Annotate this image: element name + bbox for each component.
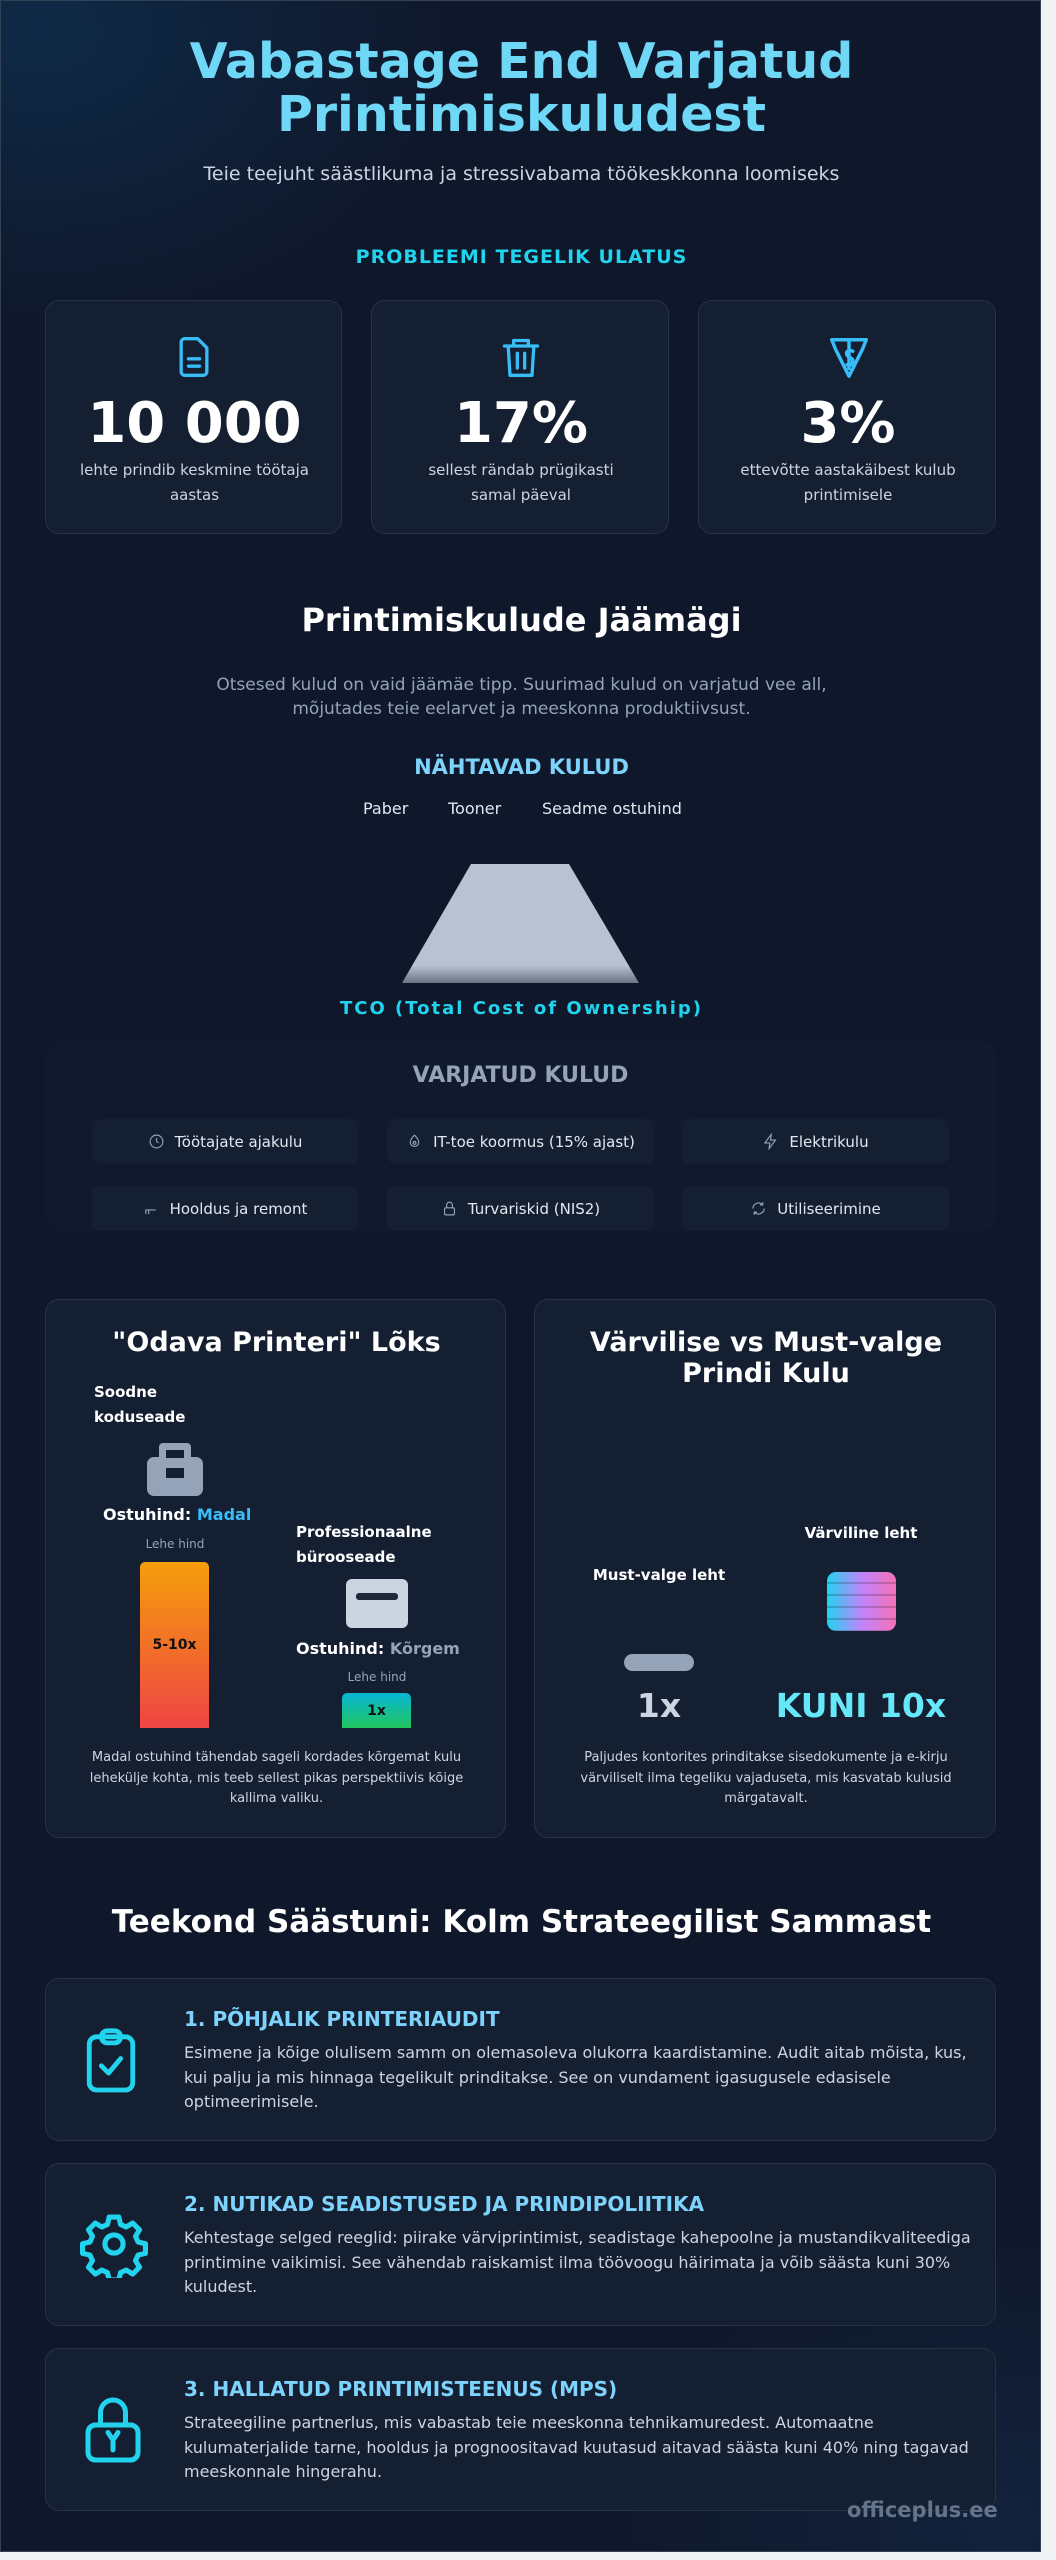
iceberg heading: Printimiskulude Jäämägi [301, 601, 742, 639]
chip: disposal [682, 1186, 949, 1231]
value KUNI 10x: KUNI 10x [776, 1686, 946, 1725]
panel: cheap printer trap [45, 1299, 506, 1838]
stat label: sellest rändab prügikasti samal päeval [428, 461, 614, 504]
step text: Kehtestage selged reeglid: piirake värviprintimist, seadistage kahepoolne ja mustandikvaliteediga printimine vaikimisi. See vähendab raiskamist ilma töövoogu häirimata ja võib säästa kuni 30% kuludest. [184, 2228, 971, 2296]
chip: disposal: Utiliseerimine [777, 1200, 881, 1218]
panel: color vs mono [534, 1299, 996, 1838]
step 2 card [45, 2163, 996, 2326]
label: Soodne [94, 1383, 157, 1401]
icon: color stack [827, 1572, 896, 1631]
panel: hidden costs [45, 1041, 996, 1231]
label: koduseade [94, 1408, 185, 1426]
TCO label: TCO (Total Cost of Ownership) [340, 998, 703, 1019]
icon: single sheet [624, 1654, 694, 1671]
subtitle: Teie teejuht säästlikuma ja stressivabama töökeskkonna loomiseks [204, 163, 839, 185]
chip: security [387, 1186, 654, 1231]
icon: trash [502, 338, 540, 377]
icon: document [180, 337, 208, 377]
chip: maintenance [92, 1186, 358, 1231]
iceberg intro text: Otsesed kulud on vaid jäämäe tipp. Suurimad kulud on varjatud vee all, [216, 675, 827, 695]
step 1 card [45, 1978, 996, 2141]
chip: security: Turvariskid (NIS2) [468, 1200, 600, 1218]
icon: clipboard check [86, 2028, 136, 2092]
stat card: 10 000 [45, 300, 342, 534]
step text: Esimene ja kõige olulisem samm on olemasoleva olukorra kaardistamine. Audit aitab mõista, kus, kui palju ja mis hinnaga tegelikult prinditakse. See on vundament igasugusele edasisele optimeerimisele. [184, 2043, 967, 2111]
stat number: 17% [454, 391, 588, 456]
chip: IT support [387, 1119, 654, 1164]
title: Vabastage End Varjatud [190, 33, 853, 90]
label: Värviline leht [805, 1524, 917, 1542]
visible costs heading: NÄHTAVAD KULUD [414, 755, 629, 779]
stat number: 3% [800, 391, 896, 456]
step title: 2. NUTIKAD SEADISTUSED JA PRINDIPOLIITIKA [184, 2192, 704, 2216]
value 1x: 1x [637, 1686, 681, 1725]
color column [776, 1524, 946, 1725]
page cost label: Lehe hind [348, 1670, 406, 1684]
title: Printimiskuludest [277, 86, 766, 143]
panel footnote: Paljudes kontorites prinditakse sisedokumente ja e-kirju värviliselt ilma tegeliku vajaduseta, mis kasvatab kulusid märgatavalt. [580, 1750, 952, 1806]
visible costs list: Seadme ostuhind [542, 799, 682, 818]
icon: money funnel [830, 338, 868, 378]
visible costs list [363, 799, 682, 818]
visible costs list: Paber [363, 799, 408, 818]
label: bürooseade [296, 1548, 396, 1566]
label: Must-valge leht [593, 1566, 725, 1584]
office device column [296, 1523, 460, 1728]
chip: electricity [682, 1119, 949, 1164]
stat label: lehte prindib keskmine töötaja aastas [80, 461, 309, 504]
iceberg tip shape [402, 864, 639, 983]
hidden costs heading: VARJATUD KULUD [413, 1063, 628, 1088]
stat card: 17% [371, 300, 669, 534]
chip: maintenance: Hooldus ja remont [170, 1200, 307, 1218]
chip: IT support: IT-toe koormus (15% ajast) [433, 1132, 635, 1150]
panel footnote: Madal ostuhind tähendab sageli kordades kõrgemat kulu lehekülje kohta, mis teeb sellest pikas perspektiivis kõige kallima valiku. [90, 1750, 463, 1806]
panel title [590, 1327, 942, 1389]
label: Professionaalne [296, 1523, 432, 1541]
steps heading: Teekond Säästuni: Kolm Strateegilist Sammast [112, 1904, 931, 1940]
title [190, 33, 853, 143]
step 3 card [45, 2348, 996, 2511]
step text: Strateegiline partnerlus, mis vabastab teie meeskonna tehnikamuredest. Automaatne kulumaterjalide tarne, hooldus ja prognoositavad kuutasud aitavad säästa kuni 40% ning tagavad meeskonnale hingerahu. [184, 2413, 969, 2481]
step title: 1. PÕHJALIK PRINTERIAUDIT [184, 2007, 500, 2031]
step title: 3. HALLATUD PRINTIMISTEENUS (MPS) [184, 2377, 617, 2401]
icon: home printer [147, 1443, 203, 1496]
home device column [94, 1383, 251, 1728]
visible costs list: Tooner [448, 799, 501, 818]
panel title: Prindi Kulu [682, 1358, 850, 1389]
purchase price: Ostuhind: Madal [103, 1505, 251, 1524]
label [296, 1523, 432, 1566]
iceberg intro text: mõjutades teie eelarvet ja meeskonna produktiivsust. [292, 699, 751, 719]
chip: electricity: Elektrikulu [789, 1132, 869, 1150]
stat number: 10 000 [87, 391, 302, 456]
iceberg intro text [216, 675, 827, 719]
purchase price: Ostuhind: Kõrgem [296, 1639, 460, 1658]
bar: 1x: 1x [367, 1702, 386, 1718]
icon: office printer [346, 1579, 408, 1628]
section heading: problem scale: PROBLEEMI TEGELIK ULATUS [356, 246, 687, 268]
chip: time [92, 1119, 358, 1164]
icon: gear [80, 2214, 148, 2278]
bar: 1x [342, 1693, 411, 1728]
stat label: ettevõtte aastakäibest kulub printimisele [740, 461, 956, 504]
bar: 5-10x [140, 1562, 209, 1728]
page cost label: Lehe hind [146, 1537, 204, 1551]
panel title: "Odava Printeri" Lõks [112, 1327, 441, 1358]
label [94, 1383, 185, 1426]
chip: time: Töötajate ajakulu [175, 1132, 302, 1150]
brand footer: officeplus.ee [847, 2498, 998, 2522]
bar: 5-10x: 5-10x [152, 1637, 197, 1653]
mono column [593, 1566, 725, 1725]
icon: padlock [86, 2398, 140, 2462]
panel title: Värvilise vs Must-valge [590, 1327, 942, 1358]
stat card: 3% [698, 300, 996, 534]
